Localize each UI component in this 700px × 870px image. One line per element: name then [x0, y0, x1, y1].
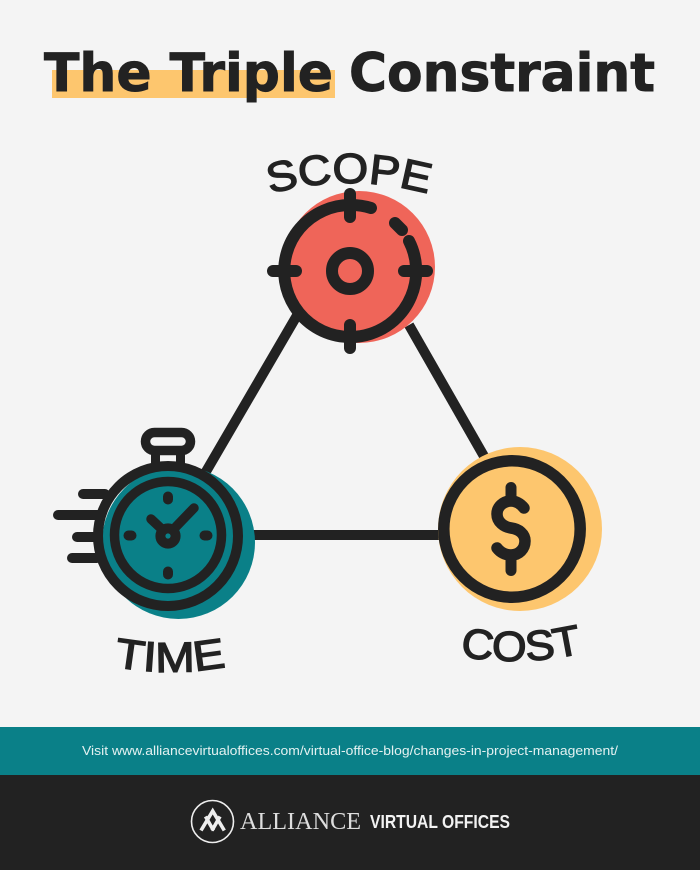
- title text: Constraint: Constraint: [349, 43, 655, 104]
- logo wordmark VIRTUAL OFFICES: VIRTUAL OFFICES: [370, 812, 510, 832]
- footer teal band: [0, 727, 700, 775]
- footer link text: Visit www.alliancevirtualoffices.com/virtual-office-blog/changes-in-project-management/: [82, 743, 618, 758]
- title highlight: [52, 70, 335, 98]
- triangle connector lines: [204, 312, 485, 535]
- time teal circle: [102, 466, 255, 619]
- label: TIME: TIME: [118, 638, 226, 673]
- stopwatch crown: [146, 432, 190, 450]
- stopwatch outer ring: [98, 466, 238, 606]
- icon: stopwatch: [58, 432, 238, 606]
- footer dark band: [0, 775, 700, 870]
- stopwatch ticks: [128, 496, 208, 574]
- cost yellow circle: [438, 447, 602, 611]
- label: COST: COST: [463, 624, 578, 662]
- logo mark: [192, 800, 234, 842]
- scope red circle: [283, 191, 435, 343]
- stopwatch hands: [151, 508, 194, 535]
- stopwatch inner ring: [114, 482, 222, 588]
- cost node: [438, 447, 602, 611]
- scope node: [273, 191, 435, 348]
- logo wordmark ALLIANCE: ALLIANCE: [240, 809, 361, 835]
- title text: The Triple: The Triple: [44, 43, 333, 104]
- time node: [58, 432, 255, 619]
- speed lines: [58, 494, 105, 558]
- icon: target: [273, 194, 427, 348]
- icon: dollar coin: [444, 461, 580, 597]
- label: SCOPE: SCOPE: [268, 152, 432, 194]
- title: [44, 43, 655, 104]
